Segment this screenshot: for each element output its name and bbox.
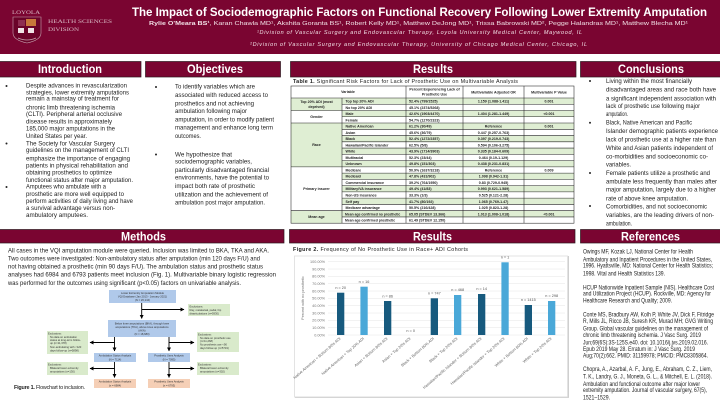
table p value column: 0.009 xyxy=(544,168,554,172)
y axis labels: 60.00% xyxy=(312,289,326,293)
flowchart box: ambulation analysis: (N = 7114) xyxy=(109,357,121,361)
text block: objectives bullets: amputation, in order to modify patient xyxy=(175,116,274,123)
logo wordmark: DIVISION xyxy=(48,27,79,33)
table header row: Variable xyxy=(341,90,355,94)
bar value labels: n = 747 xyxy=(428,292,441,296)
table variables column: Top top 20% ADI xyxy=(346,100,374,104)
text block: introduction bullets: remain a mainstay of treatment for xyxy=(26,96,119,103)
text block: methods: Two outcomes were investigated: Non-ambulatory status after amputation (min 120 days F/U) and xyxy=(8,256,261,262)
table variables column: Asian xyxy=(346,131,355,135)
flowchart box: ambulation analysis xyxy=(94,353,136,362)
table adjusted OR column: 0.335 (0.184-0.609) xyxy=(478,150,510,154)
table row group labels: Primary insurer xyxy=(303,187,330,191)
table variables column: Unknown xyxy=(346,162,362,166)
text block: methods: not having obtained a prosthetic (min 90 days F/U). The ambulation status and prosthetic status xyxy=(8,264,263,270)
y axis title: Percent with no prosthetic xyxy=(301,276,305,320)
table variables column: Hawaiian/Pacific Islander xyxy=(346,143,389,147)
table adjusted OR column: 1.159 (1.088-1.411) xyxy=(478,100,510,104)
x axis category labels xyxy=(292,336,553,390)
flowchart box: final ambulation cohort: (n = 6984) xyxy=(109,383,121,387)
flowchart box: bilateral exclusions left: Bilateral lower extremity xyxy=(50,366,79,370)
table: risk factors xyxy=(291,86,574,223)
flowchart box: exclusions left xyxy=(47,331,88,354)
y axis labels: 90.00% xyxy=(312,267,326,271)
table adjusted OR column xyxy=(478,100,510,216)
table variables column: Military/VA insurance xyxy=(346,187,382,191)
title: The Impact of Sociodemographic Factors on Functional Recovery Following Lower Extremity Amputation xyxy=(132,7,707,19)
y axis labels: 40.00% xyxy=(312,304,326,308)
heading: Results: Results xyxy=(413,230,452,244)
flowchart box: final prosthetic cohort: (n = 6793) xyxy=(163,383,175,387)
text block: introduction bullets xyxy=(6,83,134,219)
flowchart box: exclusions right: Exclusions: xyxy=(198,332,212,336)
bar value labels: n = 1415 xyxy=(521,298,536,302)
panel: results table xyxy=(290,62,576,223)
table variables column xyxy=(345,100,400,222)
table variables column: Black xyxy=(346,137,355,141)
bar value labels: n = 16 xyxy=(359,280,369,284)
flowchart box: major amputations: Below knee amputations (BKA), through knee xyxy=(115,322,170,326)
table row group labels xyxy=(300,100,333,219)
flowchart box: exclusions right xyxy=(197,332,239,352)
table variables column: Multiracial xyxy=(346,156,363,160)
panel: objectives xyxy=(146,62,280,206)
heading: Introduction xyxy=(0,62,141,77)
flowchart box: exclusions left: days follow-up (n=5898) xyxy=(50,348,79,352)
y axis labels: 10.00% xyxy=(312,326,326,330)
text block: methods xyxy=(7,248,277,287)
table variables column: Medicaid xyxy=(346,175,361,179)
flowchart box: all amputations: VQI Database (Jan 2013 - January 2021) xyxy=(118,294,167,298)
table adjusted OR column: 0.525 (0.121-2.28) xyxy=(479,194,509,198)
table percent column: 42.6% (1903/4470) xyxy=(409,112,440,116)
table header row: Percent Experiencing Lack of xyxy=(409,88,460,92)
flowchart box: final ambulation cohort: Ambulation Status Analysis xyxy=(99,380,132,384)
table percent column: 52.3% (23/44) xyxy=(409,156,432,160)
text block: objectives bullets: ambulation post major amputation. xyxy=(175,200,265,206)
table percent column: 62.5% (5/8) xyxy=(409,143,428,147)
table variables column: Mean age confirmed no prosthetic xyxy=(345,212,400,216)
flowchart box: exclusions right: No data on prosthetic use xyxy=(200,336,231,340)
authors: Rylie O'Meara BS¹ , Karan Chawla MD¹, Akshita Goranta BS¹, Robert Kelly MD¹, Matthew DeJong MD¹, Trissa Babrowski MD², Pegge Halandras MD¹, Matthew Blecha MD¹ xyxy=(149,20,688,27)
text block: references list: 1521–1529. xyxy=(583,394,610,401)
text block: objectives bullets: prosthetics and not achieving xyxy=(175,100,255,107)
y axis labels: 0.00% xyxy=(314,333,326,337)
table header row: Multivariable Adjusted OR xyxy=(471,90,516,94)
text block: references list: Owings MF, Kozak LJ, National Center for Health xyxy=(583,248,693,256)
logo: Loyola shield: LOYOLA xyxy=(12,10,40,16)
flowchart box: prosthetic analysis: (N = 7095) xyxy=(163,357,175,361)
arrows: second step xyxy=(90,337,194,351)
heading: Conclusions: Conclusions xyxy=(618,62,684,76)
table adjusted OR column: 0.438 (0.231-0.831) xyxy=(478,162,510,166)
text block: introduction bullets: guidelines on the management of CLTI xyxy=(26,147,129,154)
text block: introduction bullets: emphasize the importance of engaging xyxy=(26,155,131,162)
affiliation 2: ²Division of Vascular Surgery and Endovascular Therapy, University of Chicago Medical Center, Chicago, IL xyxy=(250,42,587,48)
text block: objectives bullets: utilization and the achievement of xyxy=(175,191,268,198)
x axis category labels: Asian + Top 20% ADI xyxy=(381,336,412,364)
x axis category labels: Hawaiian/Pacific Islander + Top 20% ADI xyxy=(449,336,506,386)
table percent column: 49.8% (151/303) xyxy=(409,162,436,166)
bar value labels: n = 1 xyxy=(501,256,509,260)
table row group labels: deprived) xyxy=(308,105,325,109)
flowchart box: bilateral exclusions left xyxy=(47,362,88,375)
heading: Methods xyxy=(0,230,284,244)
text block: introduction bullets: obtaining prosthetics to optimize xyxy=(26,170,113,177)
flowchart box: final prosthetic cohort xyxy=(148,379,190,388)
y axis labels: 100.00% xyxy=(310,260,326,264)
heading: Objectives xyxy=(146,62,280,77)
arrows: third step xyxy=(90,362,194,378)
bars xyxy=(337,262,555,335)
flowchart box: bilateral exclusions left: amputations (n=130) xyxy=(50,370,75,374)
x axis category labels: Black + Bottom 80% ADI xyxy=(400,336,435,368)
table header row xyxy=(341,88,567,96)
text block: conclusions bullets: lack of prosthetic use at a higher rate than xyxy=(606,137,717,144)
table percent column: 41.7% (80/192) xyxy=(409,200,434,204)
text block: methods: All cases in the VQI amputation module were queried. Inclusion was limited to BKA, TKA and AKA. xyxy=(8,248,269,254)
flowchart box: all amputations xyxy=(109,290,176,303)
table percent column: 45.6% (36/79) xyxy=(409,131,432,135)
flowchart box: final prosthetic cohort: Prosthetic Uses Analysis xyxy=(154,380,184,384)
table row group labels: Gender xyxy=(310,115,323,119)
table header row: Multivariable P Value xyxy=(531,90,567,94)
text block: introduction bullets: perform activities of daily living and have xyxy=(26,198,134,205)
text block: introduction bullets: United States per year. xyxy=(26,133,87,140)
panel: introduction xyxy=(0,62,141,219)
flowchart box: bilateral exclusions left: Exclusions: xyxy=(48,362,62,366)
text block: objectives bullets: particularly disadvantaged financial xyxy=(175,167,269,174)
table variables column: Mean age confirmed prosthetic xyxy=(345,218,395,222)
x axis category labels: Black + Top 20% ADI xyxy=(428,336,459,364)
text block: references list: 1998. Vital and Health Statistics 139. xyxy=(583,270,665,277)
text block: conclusions bullets: disadvantaged areas and race both have xyxy=(606,86,717,93)
heading: Conclusions xyxy=(580,62,720,77)
table adjusted OR column: 1.098 (0.942-1.31) xyxy=(479,175,509,179)
text block: objectives bullets: To identify variables which are xyxy=(175,84,256,91)
table variables column: Medicare advantage xyxy=(346,206,380,210)
text block: introduction bullets: 185,000 major amputations in the xyxy=(26,125,116,132)
panel: results chart xyxy=(290,230,575,397)
text block: references list xyxy=(583,248,714,401)
bar value labels: n = 14 xyxy=(476,287,487,291)
flowchart box: bilateral exclusions right: Bilateral lower extremity xyxy=(200,366,229,370)
text block: references list: Healthcare Research and Quality; 2009. xyxy=(583,298,672,305)
text block: methods: was performed for the outcomes using significant (p<0.05) factors on univariable analysis. xyxy=(7,280,241,287)
flowchart box: exclusions right: days follow-up (n=5719) xyxy=(200,346,229,350)
flowchart box: exclusions left: status at long-term follow- xyxy=(50,338,81,342)
table percent column: 50.5% (216/428) xyxy=(409,206,436,210)
text block: introduction bullets: The Society for Vascular Surgery xyxy=(26,140,116,147)
flowchart box: major amputations xyxy=(108,320,176,337)
flowchart box: prosthetic analysis xyxy=(148,353,190,362)
flowchart box: ambulation analysis: Ambulation Status Analysis xyxy=(99,354,132,358)
table p value column: 0.001 xyxy=(544,125,554,129)
heading: Results: Results xyxy=(413,62,453,76)
table variables column: White xyxy=(346,150,355,154)
table percent column: 47.8% (431/902) xyxy=(409,175,436,179)
table percent column: 45.1% (2374/5268) xyxy=(409,106,440,110)
table variables column: Self pay xyxy=(346,200,359,204)
flowchart box: bilateral exclusions right: Exclusions: xyxy=(198,362,212,366)
text block: conclusions bullets: amputation. xyxy=(606,111,628,118)
table row group labels: Top 20% ADI (most xyxy=(300,100,333,104)
flowchart box: exclusions left: No data on ambulation xyxy=(50,335,78,339)
table adjusted OR column: 0.993 (0.621-1.589) xyxy=(478,187,510,191)
x axis category labels: Native American + Bottom 80% ADI xyxy=(292,336,342,380)
text block: objectives bullets xyxy=(155,84,274,206)
heading: References xyxy=(580,230,720,244)
text block: introduction bullets: prosthetic are more well equipped to xyxy=(26,191,125,198)
table header row: Prosthetic Use xyxy=(422,92,447,96)
heading: Objectives: Objectives xyxy=(187,62,243,76)
flowchart box: exclusions 1 xyxy=(188,304,230,316)
panel: methods xyxy=(0,230,284,391)
x axis category labels: Hawaiian/Pacific Islander + Bottom 80% ADI xyxy=(422,336,483,390)
logo wordmark xyxy=(48,19,112,33)
text block: introduction bullets: chronic limb threatening ischemia xyxy=(26,105,116,112)
table percent column: 33.3% (1/3) xyxy=(409,194,428,198)
text block: methods: analyses had 6984 and 6793 patients meet inclusion (Fig. 1). Multivariable binary logistic regression xyxy=(8,272,277,278)
table adjusted OR column: 1.025 (0.823-1.28) xyxy=(479,206,509,210)
text block: introduction bullets: functional status after major amputation. xyxy=(26,177,133,184)
text block: introduction bullets: strategies, lower extremity amputations xyxy=(26,89,129,96)
heading: References: References xyxy=(621,230,680,244)
flowchart box: exclusions 1: disarticulations (n=5930) xyxy=(190,312,219,316)
arrows: top step xyxy=(142,303,184,318)
table row group labels: Race xyxy=(312,143,321,147)
table adjusted OR column: 0.594 (0.106-3.275) xyxy=(478,143,510,147)
table adjusted OR column: 1.404 (1.281-1.449) xyxy=(478,112,510,116)
table percent column: 52.4% (799/1525) xyxy=(409,100,438,104)
table adjusted OR column: 0.447 (0.257-0.763) xyxy=(478,131,510,135)
y axis labels: 50.00% xyxy=(312,297,326,301)
table p value column xyxy=(543,100,555,216)
table adjusted OR column: 0.397 (0.219-0.743) xyxy=(478,137,510,141)
text block: objectives bullets: ambulation following major xyxy=(175,108,247,115)
text block: conclusions bullets: variables, are the leading drivers of non- xyxy=(606,212,714,219)
y axis labels: 70.00% xyxy=(312,282,326,286)
flowchart box: major amputations: (N = 18,680) xyxy=(134,332,150,336)
table adjusted OR column: Reference xyxy=(485,125,502,129)
text block: conclusions bullets: Living within the most financially xyxy=(606,78,693,85)
flowchart box: exclusions right: No prosthesis use <90 xyxy=(200,342,227,346)
table variables column: Female xyxy=(346,118,358,122)
table adjusted OR column: Reference xyxy=(485,168,502,172)
text block: objectives bullets: associated with reduced access to xyxy=(175,92,269,99)
figure 1 caption: Figure 1. Flowchart to inclusion. xyxy=(14,385,85,391)
table percent column xyxy=(409,100,446,222)
text block: objectives bullets: sociodemographic variables, xyxy=(175,159,252,166)
bar value labels: n = 0 xyxy=(406,329,415,333)
y axis labels: 30.00% xyxy=(312,311,326,315)
table p value column: 0.001 xyxy=(544,100,554,104)
bar value labels: n = 20 xyxy=(335,286,346,290)
bar value labels: n = 86 xyxy=(382,294,393,298)
table adjusted OR column: 1.065 (0.769-1.47) xyxy=(479,200,509,204)
x axis category labels: White + Top 20% ADI xyxy=(522,336,553,364)
text block: references list: Epub 2019 May 28. Erratum in: J Vasc Surg. 2019 xyxy=(583,346,695,353)
flowchart box: exclusions 1: Exclusions: xyxy=(190,304,203,308)
y axis labels xyxy=(310,260,326,337)
table adjusted OR column: 0.83 (0.729-0.945) xyxy=(479,181,509,185)
text block: introduction bullets: patients in physical rehabilitation and xyxy=(26,163,129,170)
flowchart box: exclusions left: Non-ambulating with <120 xyxy=(50,345,82,349)
x axis category labels: Asian + Bottom 80% ADI xyxy=(353,336,389,368)
table variables column: No top 20% ADI xyxy=(346,106,372,110)
text block: conclusions bullets: Islander demographic patients experience xyxy=(606,128,719,135)
logo wordmark: HEALTH SCIENCES xyxy=(48,19,112,25)
flowchart box: all amputations: Lower Extremity Amputation Module xyxy=(121,291,165,295)
table percent column: 49.4% (41/83) xyxy=(409,187,432,191)
text block: conclusions bullets: lack of prosthetic use following major xyxy=(606,103,700,110)
flowchart box: exclusions right: (n=11,268) xyxy=(200,339,213,343)
flowchart box: bilateral exclusions right: amputations (n=302) xyxy=(200,370,225,374)
figure 2 caption: Figure 2. Frequency of No Prosthetic Use in Race+ ADI Cohorts xyxy=(293,247,468,253)
flowchart box: major amputations: amputations (TKA), above knee amputations xyxy=(115,325,169,329)
text block: objectives bullets: impact both rate of prosthetic xyxy=(175,183,255,190)
flowchart box: final ambulation cohort xyxy=(94,379,136,388)
text block: introduction bullets: Amputees who ambulate with a xyxy=(26,184,107,191)
table percent column: 50.9% (1637/3218) xyxy=(409,168,440,172)
table variables column: Non-US insurance xyxy=(346,194,377,198)
text block: objectives bullets: management and enhance long term xyxy=(175,125,273,132)
table percent column: 65.05 (STDEV 13.366) xyxy=(409,212,446,216)
heading: Results xyxy=(290,62,576,77)
text block: conclusions bullets: major amputation, largely due to a higher xyxy=(606,187,716,194)
text block: conclusions bullets: ambulate less frequently than males after xyxy=(606,178,717,185)
text block: conclusions bullets: Comorbidities, and not socioeconomic xyxy=(606,204,707,211)
text block: conclusions bullets: ambulation. xyxy=(606,220,632,227)
text block: introduction bullets: (CLTI). Peripheral arterial occlusive xyxy=(26,111,123,118)
text block: conclusions bullets: a significant independent association with xyxy=(606,95,717,102)
text block: conclusions bullets: White and Asian patients independent of xyxy=(606,145,713,152)
y axis labels: 80.00% xyxy=(312,275,326,279)
bar value labels xyxy=(335,256,558,333)
panel: conclusions xyxy=(580,62,720,227)
bar value labels: n = 468 xyxy=(451,288,464,292)
table percent column: 61.49 (STDEV 12.150) xyxy=(409,218,446,222)
x axis category labels: Native American + Top 20% ADI xyxy=(320,336,365,376)
table percent column: 43.9% (1714/3903) xyxy=(409,150,440,154)
flowchart box: all amputations: (N = 26,144) xyxy=(135,298,150,302)
table p value column: <0.001 xyxy=(543,112,555,116)
table adjusted OR column: 1.013 (1.008-1.018) xyxy=(478,212,510,216)
text block: objectives bullets: environments, have the potential to xyxy=(175,175,270,182)
heading: Results xyxy=(290,230,575,244)
text block: conclusions bullets: variables. xyxy=(606,162,631,169)
text block: objectives bullets: outcomes. xyxy=(175,133,201,140)
bar value labels: n = 298 xyxy=(545,294,558,298)
table percent column: 54.7% (1270/2323) xyxy=(409,118,440,122)
affiliation 1: ¹Division of Vascular Surgery and Endovascular Therapy, Loyola University Medical Center, Maywood, IL xyxy=(257,30,582,36)
text block: objectives bullets: We hypothesize that xyxy=(175,151,232,158)
table percent column: 39.2% (764/1950) xyxy=(409,181,438,185)
flowchart box: exclusions 1: Ray, metatarsal, pedal, hip xyxy=(190,308,222,312)
logo: Loyola shield xyxy=(12,10,41,43)
table percent column: 61.2% (30/49) xyxy=(409,125,432,129)
table variables column: Medicare xyxy=(346,168,361,172)
flowchart box: exclusions left: Exclusions: xyxy=(48,332,62,336)
flowchart box: prosthetic analysis: Prosthetic Uses Analysis xyxy=(154,354,184,358)
table variables column: Male xyxy=(346,112,354,116)
text block: conclusions bullets: rate of above knee amputation. xyxy=(606,195,688,202)
panel: references xyxy=(580,230,720,401)
y axis labels: 20.00% xyxy=(312,319,326,323)
text block: introduction bullets: Despite advances in revascularization xyxy=(26,83,128,90)
bar chart: no prosthetic use by cohort xyxy=(292,256,568,397)
flowchart box: major amputations: (AKA) xyxy=(138,328,146,332)
text block: introduction bullets: a survival advantage versus non- xyxy=(26,205,115,212)
heading: Methods: Methods xyxy=(121,230,166,244)
text block: introduction bullets: ambulatory amputees. xyxy=(26,212,88,219)
flowchart box: exclusions left: up (n=11,378) xyxy=(50,341,67,345)
text block: conclusions bullets: Black, Native American and Pacific xyxy=(606,120,692,127)
heading: Introduction: Introduction xyxy=(38,62,102,76)
table row group labels: Mean age xyxy=(308,215,325,219)
table adjusted OR column: 0.464 (0.19-1.129) xyxy=(479,156,509,160)
table percent column: 52.4% (1272/2357) xyxy=(409,137,440,141)
flowchart box: bilateral exclusions right xyxy=(197,362,239,375)
header banner xyxy=(0,0,720,54)
text block: conclusions bullets: Female patients utilize a prosthetic and xyxy=(606,170,711,177)
text block: conclusions bullets xyxy=(589,78,719,227)
x axis category labels: White + Bottom 80% ADI xyxy=(493,336,529,368)
table caption: Table 1. Significant Risk Factors for Lack of Prosthetic Use on Multivariable Analysis xyxy=(293,79,518,85)
table variables column: Native American xyxy=(346,125,374,129)
table variables column: Commercial insurance xyxy=(346,181,384,185)
flowchart: patient inclusion xyxy=(47,290,239,388)
text block: introduction bullets: disease results in approximately xyxy=(26,118,113,125)
table p value column: <0.001 xyxy=(543,212,555,216)
text block: conclusions bullets: co-morbidities and socioeconomic co- xyxy=(606,154,708,161)
